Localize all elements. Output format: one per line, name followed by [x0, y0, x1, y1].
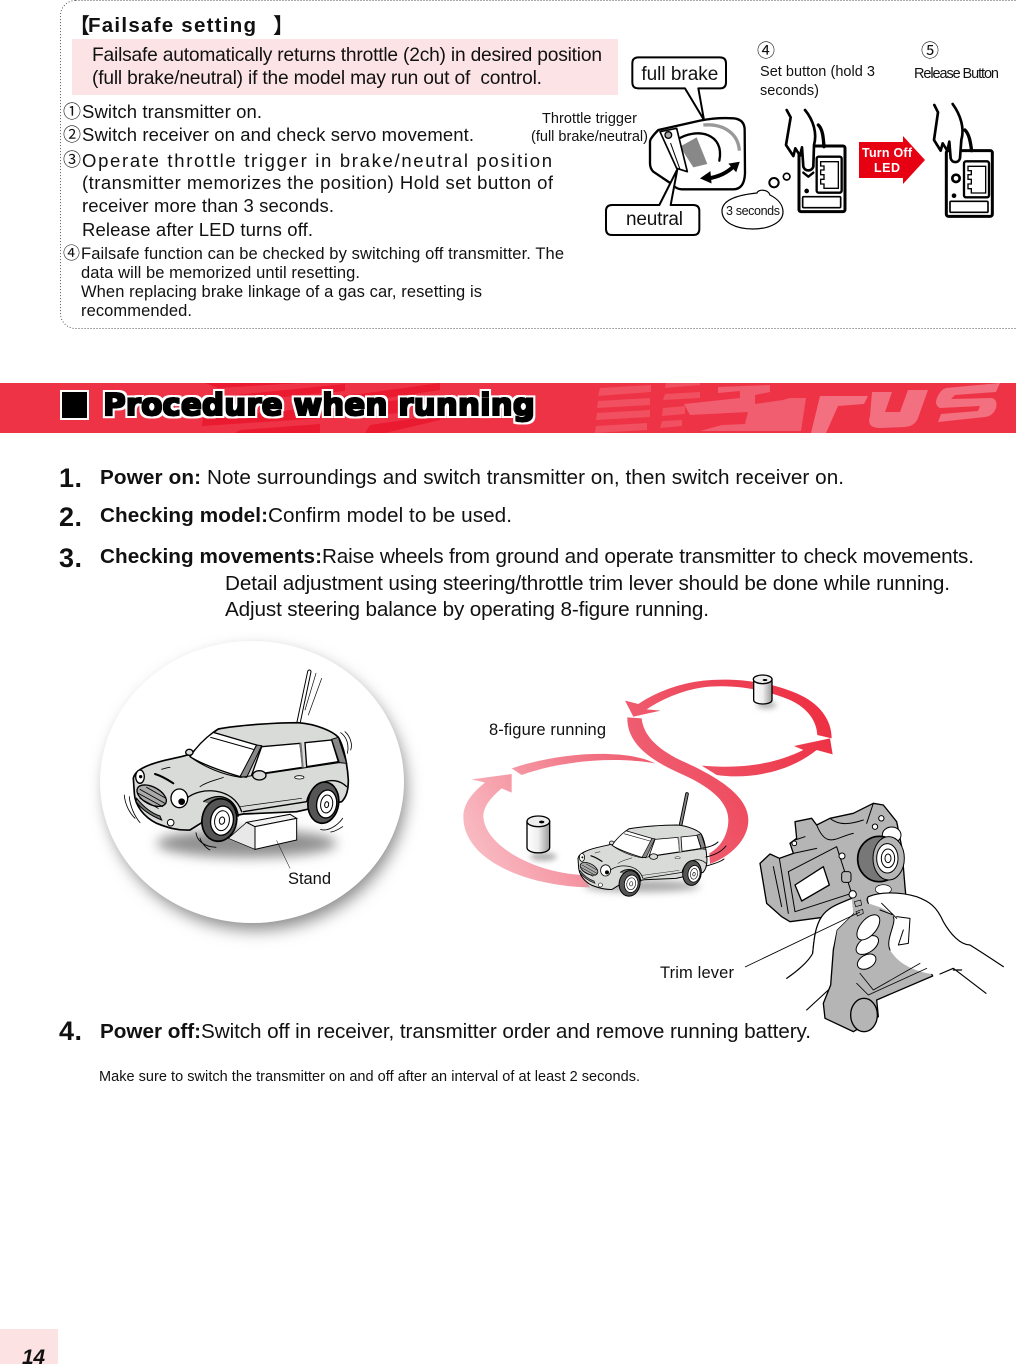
arrow: lower left loop — [463, 774, 590, 887]
step 4: power off: 4. — [59, 1016, 82, 1046]
callout: failsafe description: Failsafe automatically returns throttle (2ch) in desired position — [92, 45, 602, 66]
label: throttle trigger: Throttle trigger — [542, 111, 637, 127]
step 4: power off: Switch off in receiver, transmitter order and remove running battery. — [201, 1020, 811, 1043]
callout: 3 seconds — [722, 190, 783, 229]
page number tab — [0, 1329, 58, 1364]
text block: numbered failsafe steps — [63, 101, 564, 320]
icon: pylon upper — [753, 675, 772, 704]
arrow: upper loop top — [625, 680, 832, 738]
text block: numbered failsafe steps: (transmitter memorizes the position) Hold set button of — [82, 172, 554, 193]
text block: numbered failsafe steps: When replacing brake linkage of a gas car, resetting is — [81, 283, 482, 301]
step 1: power on: Power on: — [100, 466, 201, 489]
illustration: transmitter held in hands — [760, 803, 1003, 1032]
text: step 5 release button — [914, 41, 999, 82]
callout: 3 seconds: 3 seconds — [726, 204, 780, 218]
step 2: checking model — [59, 502, 512, 532]
step 3: checking movements: Checking movements: — [100, 545, 322, 568]
arrow: central crossing — [627, 717, 748, 864]
text: step 5 release button: ⑤ — [921, 41, 939, 61]
callout: full brake — [632, 57, 726, 120]
arrow: lower loop top — [512, 754, 655, 775]
step 3: checking movements: Adjust steering balance by operating 8-figure running. — [225, 598, 709, 621]
heading: failsafe setting: 】 — [273, 15, 294, 38]
text block: numbered failsafe steps: recommended. — [81, 302, 192, 320]
step 1: power on — [59, 463, 844, 493]
step 3: checking movements — [59, 543, 974, 621]
motion marks — [124, 732, 351, 850]
step 1: power on: Note surroundings and switch transmitter on, then switch receiver on. — [207, 466, 844, 489]
arrow: turn off LED: Turn Off — [862, 146, 913, 160]
decorative dark stripes — [202, 383, 440, 433]
text block: numbered failsafe steps: receiver more than 3 seconds. — [82, 195, 334, 216]
label: trim lever: Trim lever — [660, 964, 734, 982]
step 3: checking movements: 3. — [59, 543, 82, 573]
text: step 5 release button: Release Button — [914, 66, 999, 82]
icon: black square — [61, 391, 88, 419]
text block: numbered failsafe steps: data will be memorized until resetting. — [81, 264, 360, 282]
step 2: checking model: 2. — [59, 502, 82, 532]
callout: neutral: neutral — [626, 209, 683, 230]
heading: procedure when running: Procedure when running — [103, 388, 535, 423]
step 2: checking model: Confirm model to be used. — [268, 504, 512, 527]
text block: numbered failsafe steps: ④ — [63, 244, 80, 263]
text: step 4 set button: Set button (hold 3 — [760, 64, 875, 80]
diagram: throttle trigger position — [606, 57, 745, 235]
step 3: checking movements: Detail adjustment using steering/throttle trim lever should be done while running. — [225, 572, 950, 595]
step 4: power off — [59, 1016, 811, 1046]
illustration: small running car — [578, 794, 726, 898]
label: 8-figure running: 8-figure running — [489, 721, 606, 739]
antenna — [297, 672, 322, 728]
stand — [228, 814, 297, 849]
note: power interval: Make sure to switch the transmitter on and off after an interval of at least 2 seconds. — [99, 1069, 640, 1085]
label: throttle trigger — [531, 111, 648, 145]
step 4: power off: Power off: — [100, 1020, 201, 1043]
callout: full brake: full brake — [641, 64, 718, 85]
text block: numbered failsafe steps: Switch receiver on and check servo movement. — [82, 124, 474, 145]
right hand — [867, 893, 1003, 993]
label: throttle trigger: (full brake/neutral) — [531, 129, 648, 145]
label: stand: Stand — [288, 870, 331, 888]
text: step 4 set button: seconds) — [760, 83, 819, 99]
leader line: trim lever — [745, 912, 860, 967]
step 1: power on: 1. — [59, 463, 82, 493]
text: step 4 set button — [757, 41, 875, 99]
heading: failsafe setting: 【 — [69, 15, 90, 38]
illustration: car on stand in circle — [100, 641, 406, 930]
text block: numbered failsafe steps: Operate throttle trigger in brake/neutral position — [82, 150, 552, 171]
heading: failsafe setting: Failsafe setting — [88, 14, 256, 37]
icon: hand released from receiver — [934, 104, 992, 216]
callout: failsafe description — [72, 39, 618, 95]
arrow: turn off LED: LED — [874, 161, 900, 175]
text block: numbered failsafe steps: ② — [63, 125, 81, 145]
panel: failsafe setting — [60, 0, 1016, 328]
step 3: checking movements: Raise wheels from ground and operate transmitter to check movements. — [322, 545, 974, 568]
text block: numbered failsafe steps: Failsafe function can be checked by switching off transmitter. The — [81, 245, 564, 263]
text block: numbered failsafe steps: ③ — [63, 150, 81, 170]
text block: numbered failsafe steps: Release after LED turns off. — [82, 219, 313, 240]
callout: neutral — [606, 169, 699, 235]
text block: numbered failsafe steps: Switch transmitter on. — [82, 101, 262, 122]
diagram: 8-figure course — [463, 675, 833, 887]
icon: pylon lower — [527, 816, 550, 853]
left hand — [787, 898, 884, 1010]
arrow: upper right loop — [702, 738, 833, 776]
text block: numbered failsafe steps: ① — [63, 102, 81, 122]
callout: failsafe description: (full brake/neutral) if the model may run out of control. — [92, 68, 542, 89]
step 2: checking model: Checking model: — [100, 504, 268, 527]
text: step 4 set button: ④ — [757, 41, 775, 61]
arrow: turn off LED — [859, 136, 925, 184]
icon: hand pressing set button on receiver — [769, 110, 845, 212]
banner logo shapes — [595, 383, 700, 433]
banner: procedure when running — [0, 383, 1016, 433]
